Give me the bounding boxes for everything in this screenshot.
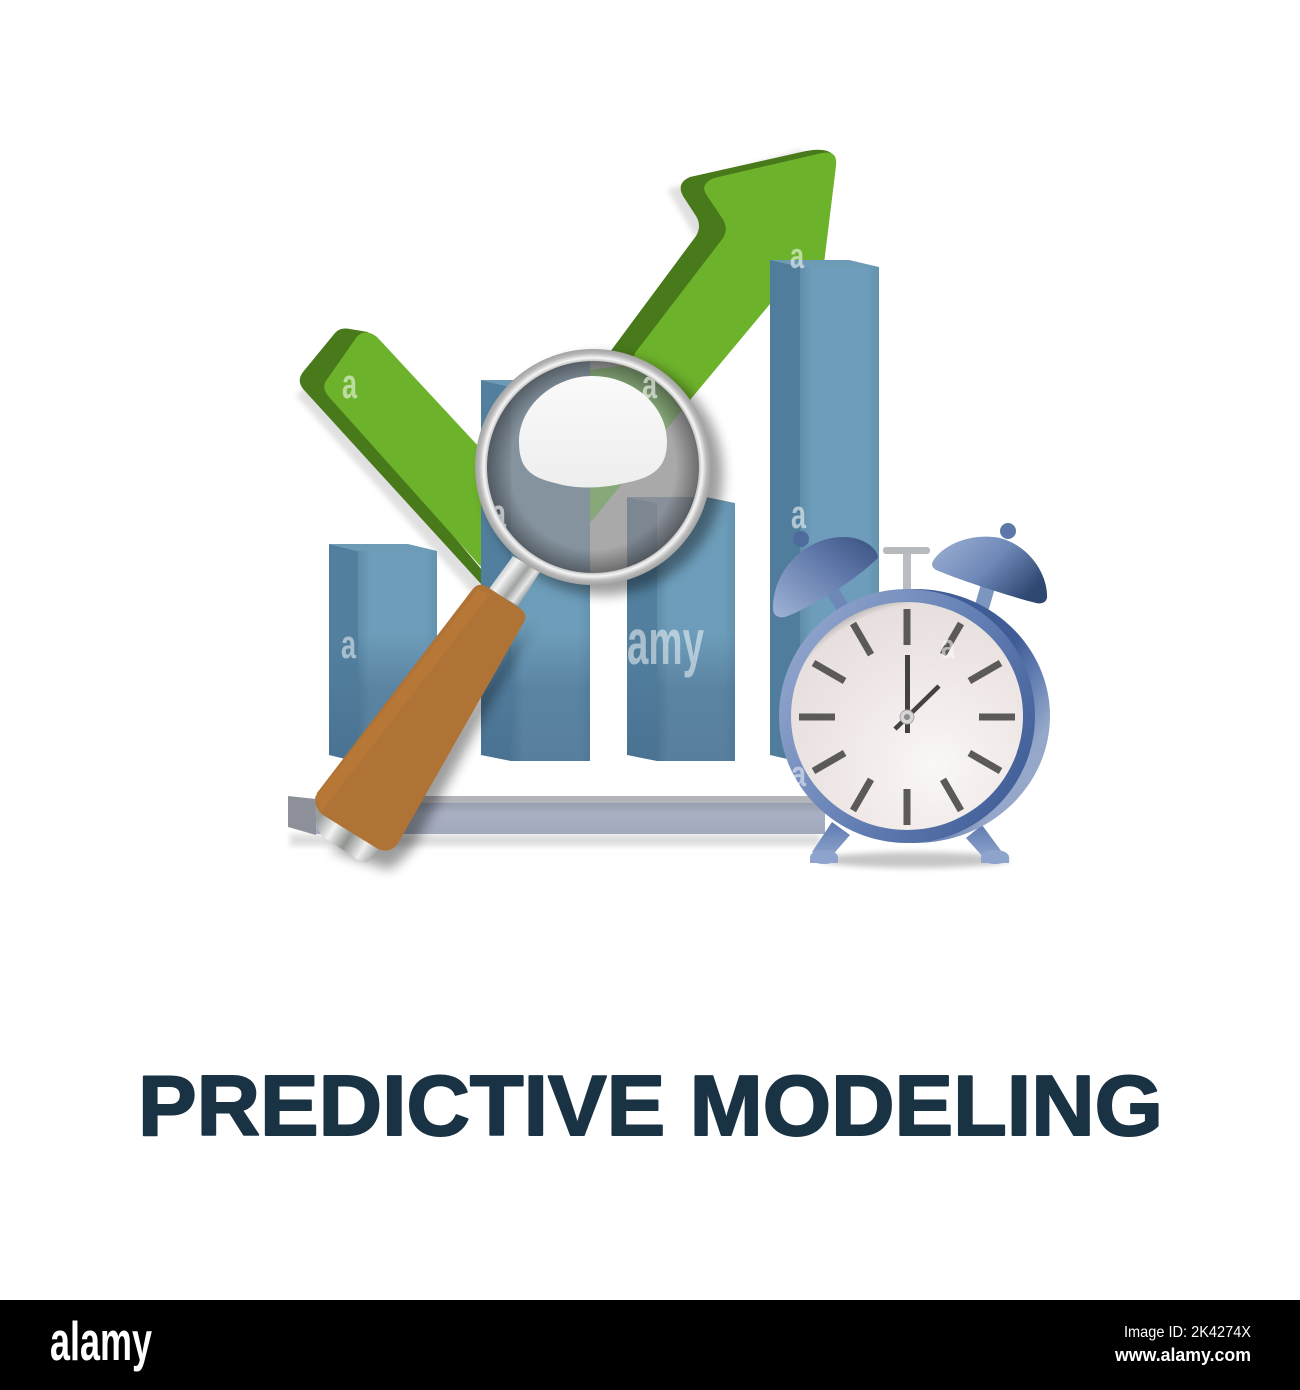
clock case <box>780 589 1050 843</box>
handle shadow <box>330 620 535 870</box>
bar 1: a <box>341 623 357 667</box>
footer logo: alamy <box>50 1310 152 1372</box>
lens highlight <box>519 376 667 488</box>
feet <box>810 822 1009 864</box>
magnifying glass <box>315 349 723 870</box>
clock face <box>791 602 1023 830</box>
clock hands <box>895 655 939 733</box>
clock shadow <box>820 852 1010 868</box>
website: www.alamy.com <box>1114 1345 1251 1365</box>
watermark letters on clock: a <box>941 628 956 666</box>
icon: predictive modeling illustration <box>288 150 1050 870</box>
bells and stems <box>773 523 1047 617</box>
title: PREDICTIVE MODELING <box>138 1059 1163 1154</box>
lens <box>487 361 699 573</box>
alarm clock <box>773 523 1050 868</box>
hour ticks <box>799 609 1015 825</box>
bar 2 <box>481 380 590 761</box>
lens ring <box>475 349 711 585</box>
bar 4: a <box>791 493 807 537</box>
watermark word on bar: amy <box>627 606 704 678</box>
lens: a <box>491 492 507 536</box>
watermark letter on arrow: a <box>342 360 357 407</box>
footer bar <box>0 1300 1300 1390</box>
bar 3 <box>627 497 735 761</box>
metal neck <box>489 556 540 606</box>
winding key <box>883 547 930 591</box>
shelf: chart base <box>288 796 825 846</box>
bar 1 <box>329 544 437 762</box>
arrow: green upward trend <box>300 150 836 590</box>
bar 4: a <box>790 235 805 276</box>
end cap <box>316 805 382 862</box>
image id: Image ID: 2K4274X <box>1124 1324 1251 1341</box>
watermark letters in lens: a <box>642 363 658 407</box>
wooden handle <box>315 585 525 851</box>
bar 4 <box>770 235 879 762</box>
alarm clock: a <box>791 753 807 794</box>
